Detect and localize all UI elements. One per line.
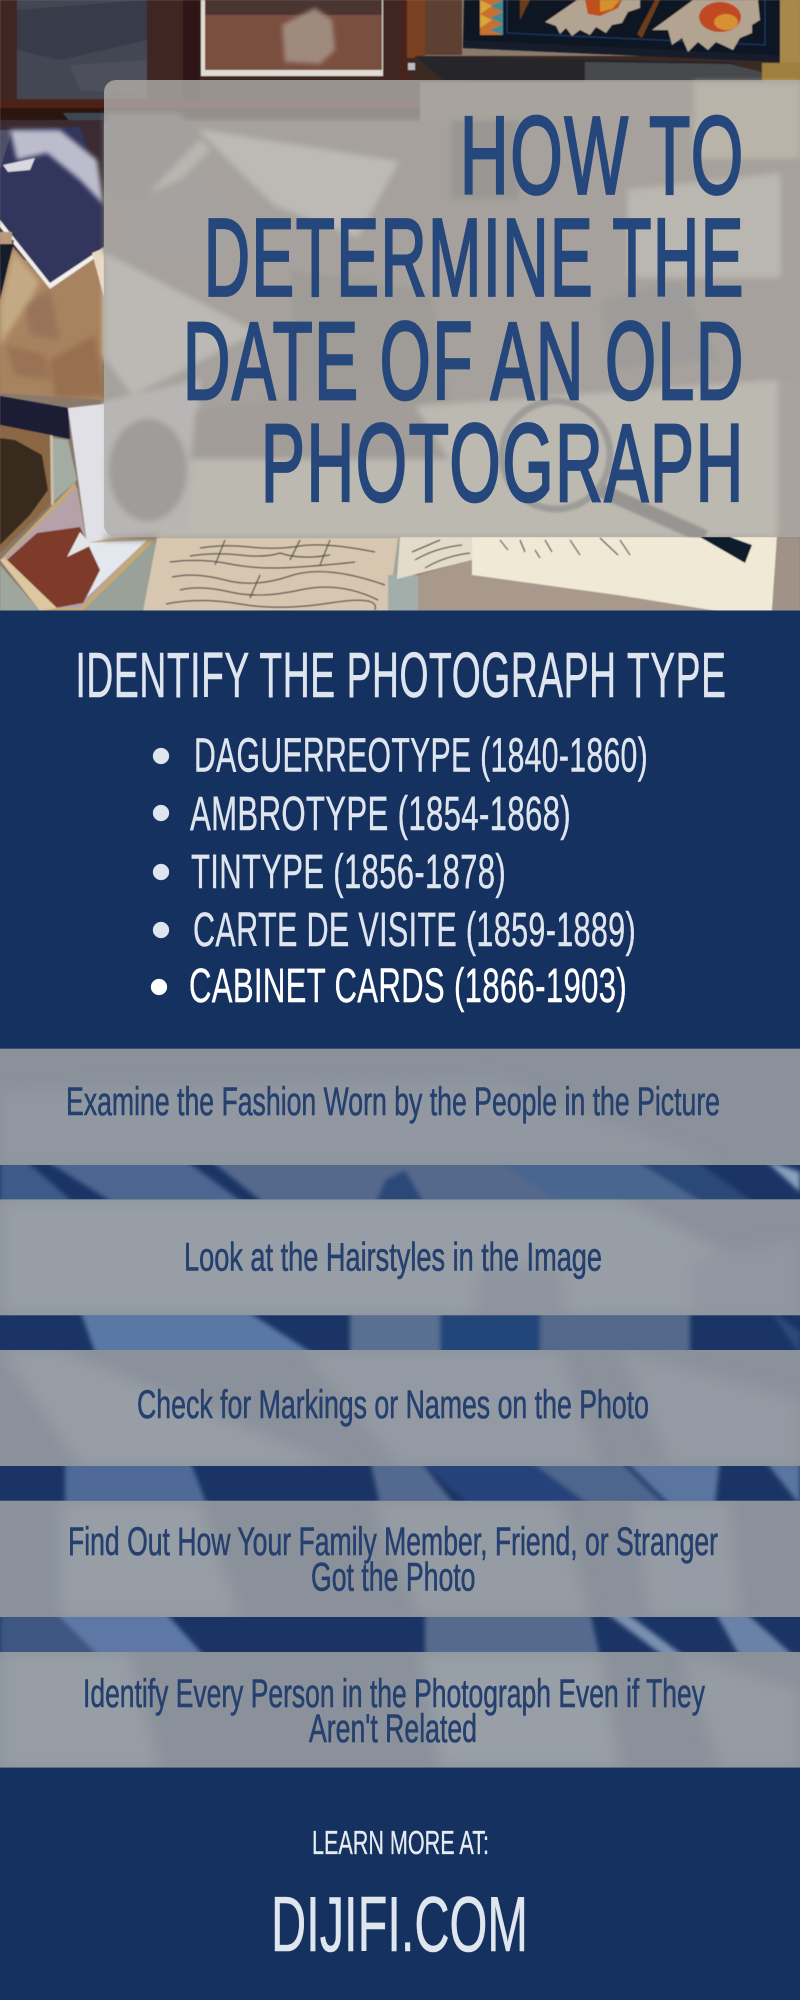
burlap <box>779 0 800 64</box>
tips background photo <box>0 1165 800 1767</box>
faint shapes under title panel <box>104 82 800 540</box>
title panel <box>104 80 800 537</box>
tip band 5 <box>0 1652 800 1768</box>
soldier portrait <box>52 438 77 503</box>
tip band 1 <box>0 1049 800 1165</box>
feathers <box>545 0 640 36</box>
white card <box>67 403 118 543</box>
tip band 5: Aren't Related <box>309 1707 477 1751</box>
navy floral card <box>0 396 70 439</box>
blue portrait photo <box>0 120 104 260</box>
tip band 4 <box>0 1501 800 1617</box>
footer panel <box>0 1768 800 2000</box>
list: photograph types: AMBROTYPE (1854-1868) <box>190 788 571 841</box>
leather strap <box>400 0 408 80</box>
bottom strip: letters and magnifier handle <box>143 537 800 611</box>
tip band 2 <box>0 1199 800 1315</box>
panel: photograph types <box>0 610 800 1049</box>
black decorated box <box>415 56 800 82</box>
list: photograph types: TINTYPE (1856-1878) <box>191 846 506 899</box>
list: photograph types <box>151 730 648 1013</box>
handwriting on letters <box>166 538 630 610</box>
hero photo collage background <box>0 0 800 611</box>
tip band 3 <box>0 1350 800 1466</box>
tip band 4: Got the Photo <box>311 1556 476 1600</box>
website: DIJIFI.COM <box>271 1880 528 1968</box>
sepia group portrait <box>0 247 104 400</box>
dark landscape photo <box>17 0 147 99</box>
album page <box>0 0 420 101</box>
red portrait frame <box>0 565 40 611</box>
tip band 2: Look at the Hairstyles in the Image <box>184 1236 602 1280</box>
title heading <box>183 94 745 525</box>
family photo <box>201 0 383 76</box>
gray photo corner <box>62 112 104 120</box>
learn more label: LEARN MORE AT: <box>312 1824 489 1861</box>
